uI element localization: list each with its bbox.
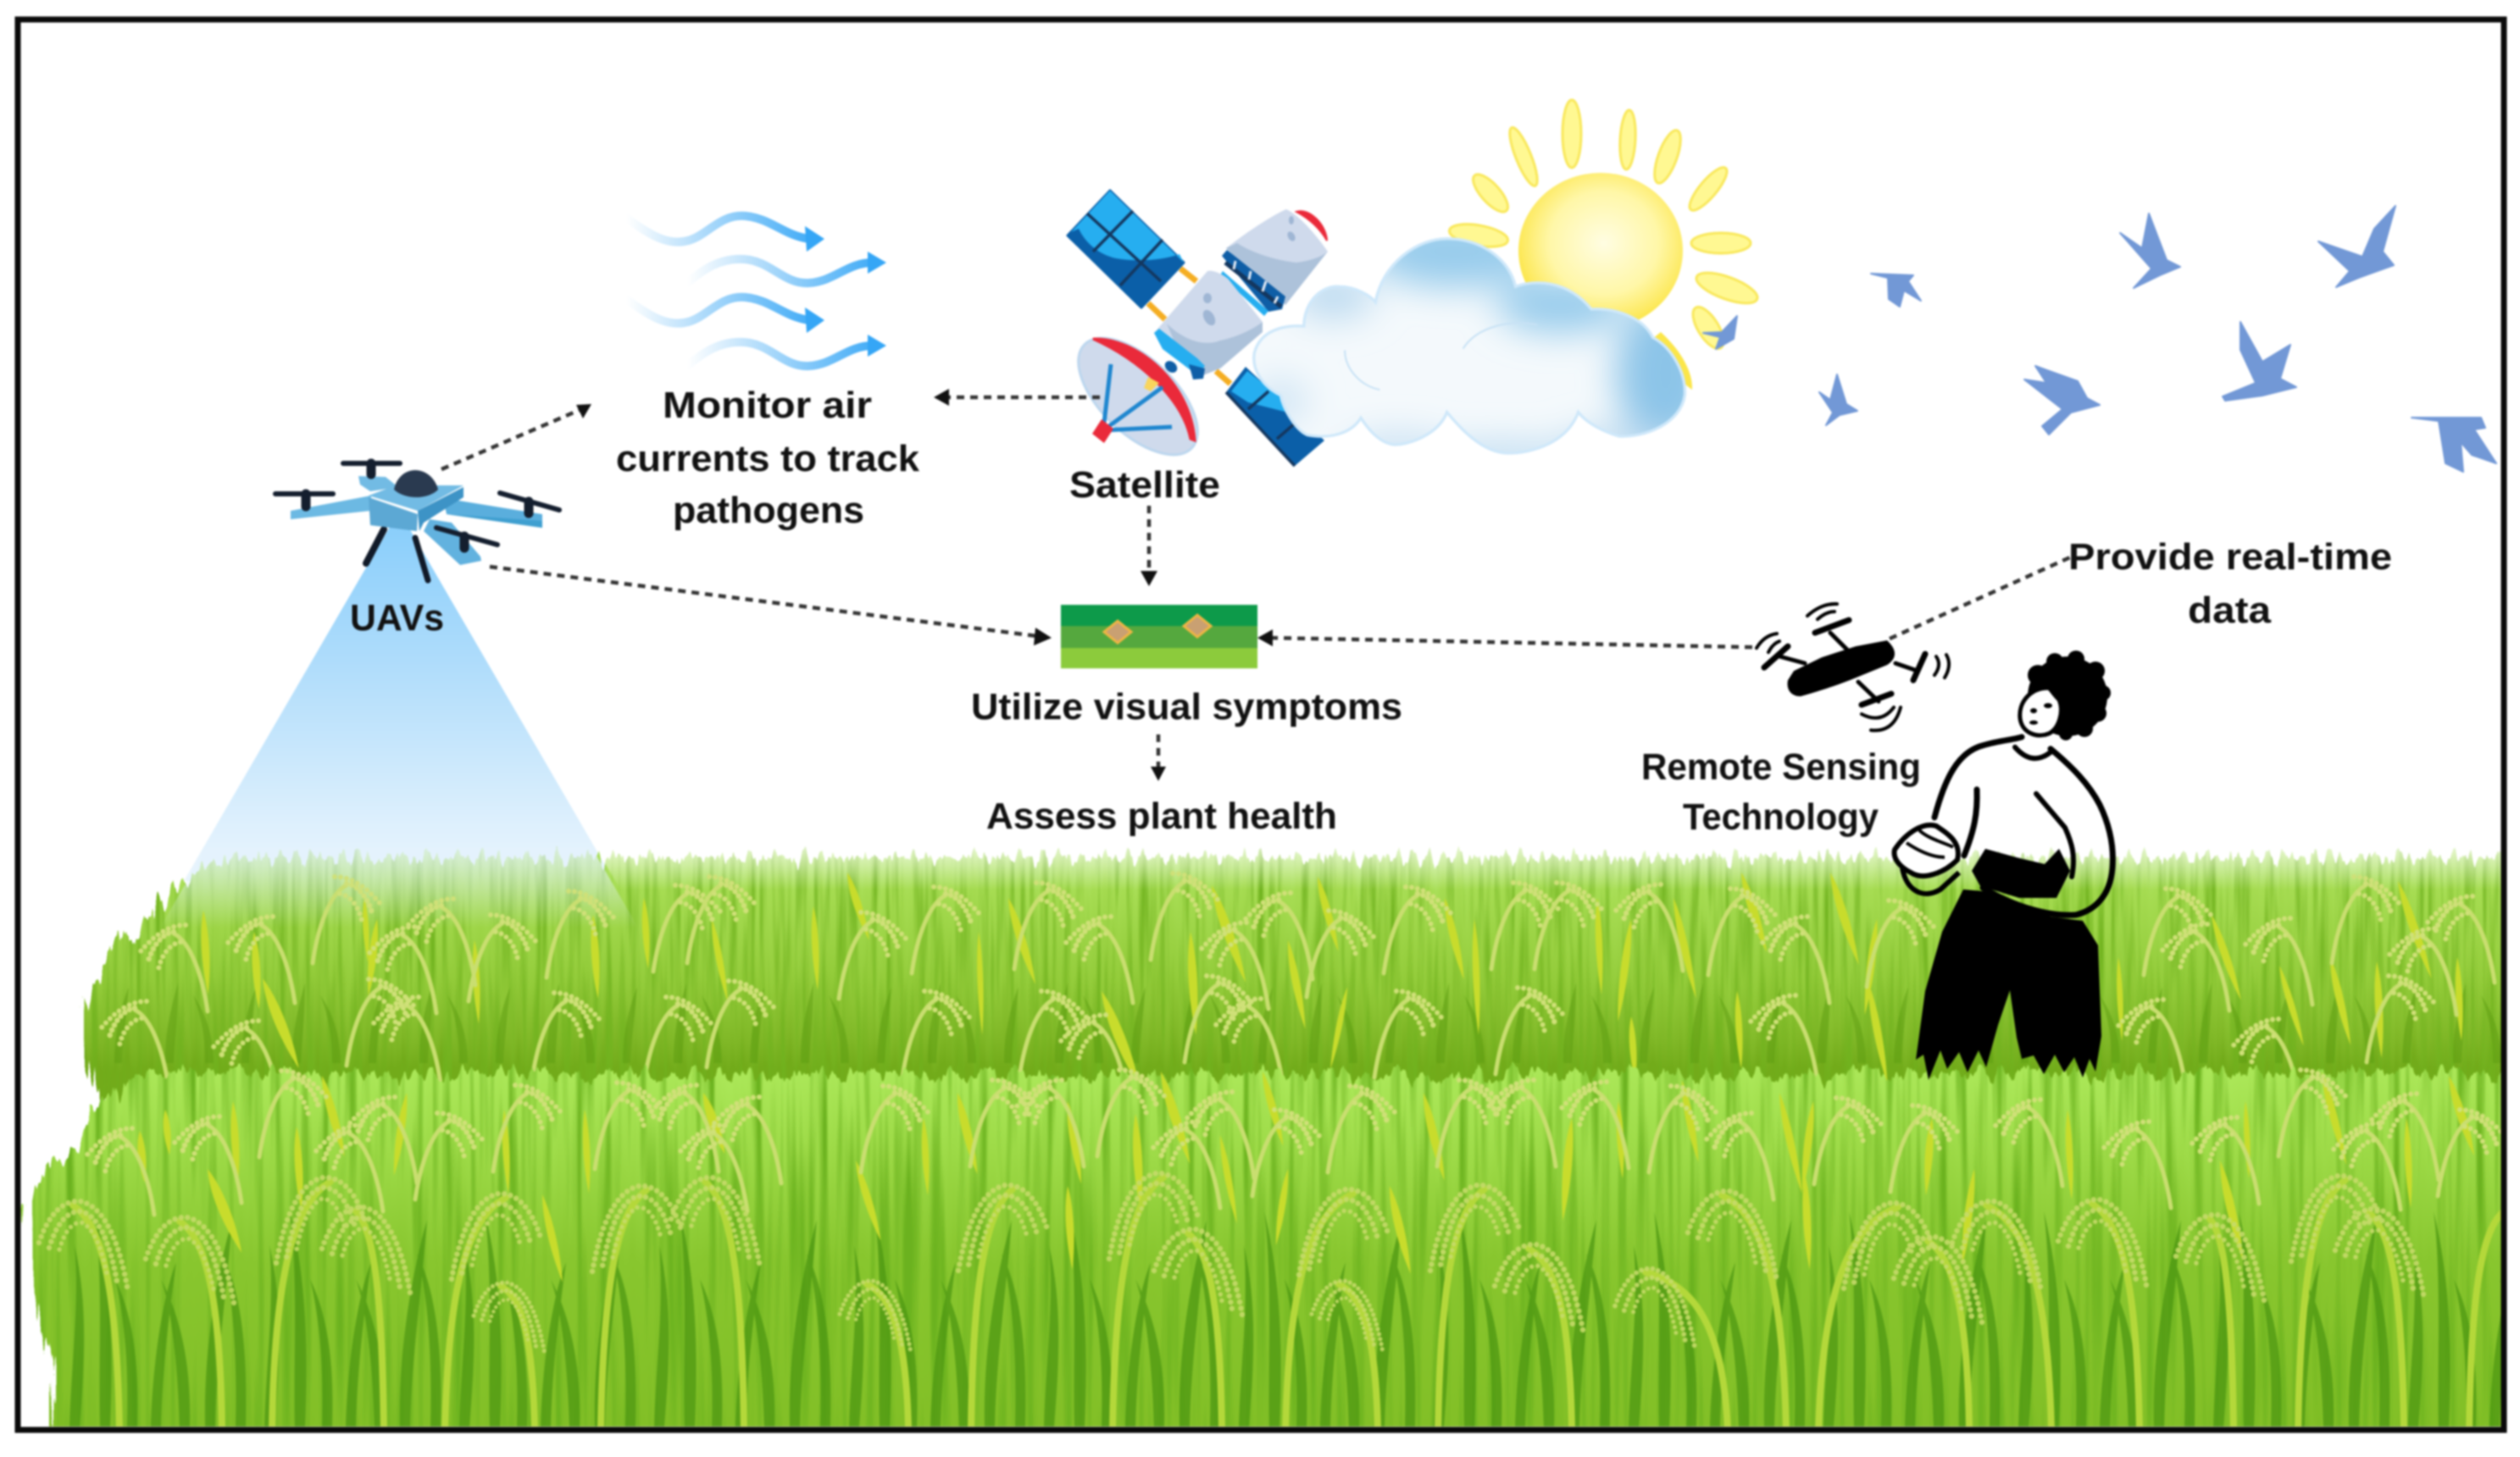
arrow: UAV to monitor air bbox=[441, 404, 591, 469]
arrow: UAV to symptoms bbox=[490, 567, 1052, 645]
icon: satellite bbox=[1058, 191, 1328, 475]
text: provide real-time data bbox=[2068, 536, 2392, 631]
trousers bbox=[1916, 889, 2101, 1080]
sweater outline bbox=[1934, 737, 2112, 915]
hair bbox=[2028, 651, 2111, 740]
face bbox=[2020, 688, 2061, 735]
icon: person with controller bbox=[1895, 651, 2112, 1080]
UAV light beam bbox=[184, 511, 614, 881]
satellite lower body bbox=[1154, 271, 1263, 379]
arrow: satellite to symptoms bbox=[1141, 506, 1157, 586]
rice field bbox=[27, 843, 2520, 1440]
panicles, back row bbox=[101, 873, 2495, 1107]
text: monitor air currents: currents to track bbox=[616, 438, 920, 479]
text: provide real-time data: Provide real-time bbox=[2068, 536, 2392, 578]
icon: leaf symptom strip bbox=[1061, 605, 1257, 668]
arrow: satellite to monitor air bbox=[934, 389, 1100, 406]
text: provide real-time data: data bbox=[2188, 590, 2272, 631]
line: drone to real-time data bbox=[1890, 557, 2070, 639]
solar panel upper bbox=[1068, 191, 1184, 307]
icon: black remote sensing drone bbox=[1757, 604, 1949, 730]
text: monitor air currents: Monitor air bbox=[663, 385, 872, 426]
front row of rice bbox=[27, 1070, 2520, 1440]
arrow: symptoms to plant health bbox=[1151, 734, 1166, 781]
text: remote sensing technology: Technology bbox=[1683, 796, 1879, 838]
text: monitor air currents: pathogens bbox=[673, 490, 864, 531]
satellite struts bbox=[1148, 269, 1230, 384]
icon: birds bbox=[1703, 206, 2496, 472]
hands and controller bbox=[1895, 825, 1959, 894]
panicles, upper front row bbox=[86, 1070, 2506, 1215]
text: monitor air currents bbox=[616, 385, 920, 531]
arrows bbox=[441, 389, 2070, 781]
icon: cloud bbox=[1252, 235, 1687, 456]
tall rice stalks bbox=[39, 1173, 2504, 1432]
text: utilize visual symptoms: Utilize visual symptoms bbox=[971, 686, 1402, 728]
text: remote sensing technology: Remote Sensing bbox=[1641, 746, 1921, 788]
text: remote sensing technology bbox=[1641, 746, 1921, 838]
arrow: drone to symptoms bbox=[1257, 629, 1752, 647]
icon: sun bbox=[1447, 100, 1761, 390]
solar panel lower bbox=[1226, 367, 1324, 466]
text: assess plant health: Assess plant health bbox=[986, 795, 1337, 837]
text: Satellite: Satellite bbox=[1069, 464, 1220, 506]
icon: blue UAV drone bbox=[275, 463, 559, 580]
forearm bbox=[1972, 849, 2070, 898]
heading: UAVs: UAVs bbox=[350, 597, 444, 639]
back row of rice bbox=[80, 843, 2520, 1127]
satellite dish bbox=[1058, 318, 1218, 475]
satellite upper body bbox=[1220, 209, 1328, 316]
icon: air currents bbox=[626, 216, 886, 366]
